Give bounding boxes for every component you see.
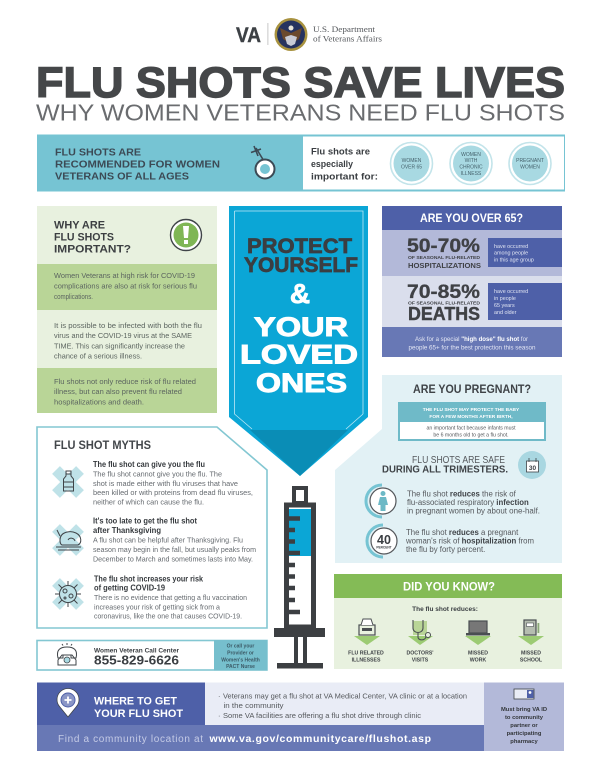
panel: are you pregnant: The flu shot reduces the risk of: [407, 490, 517, 498]
badge: women over 65: WOMEN: [402, 158, 422, 164]
icon: pregnant woman: [366, 485, 396, 517]
stat: hospitalizations: HOSPITALIZATIONS: [408, 261, 481, 270]
panel: where to get your flu shot: ·: [218, 711, 220, 720]
panel: recommended for women veterans: RECOMMENDED FOR WOMEN: [55, 160, 220, 170]
panel: are you pregnant: DURING ALL TRIMESTERS.: [382, 464, 508, 476]
stat: hospitalizations: in this age group: [494, 258, 534, 264]
icon: telephone: [57, 643, 77, 665]
banner: protect yourself: YOURSELF: [244, 254, 358, 277]
panel: where to get your flu shot: [37, 682, 564, 751]
badge: women with chronic illness: [450, 142, 492, 184]
myth 3: There is no evidence that getting a flu vaccination: [94, 593, 247, 602]
panel: why are flu shots important: It is possible to be infected with both the flu: [54, 321, 202, 330]
panel: where to get your flu shot: to community: [505, 715, 544, 721]
myth 3: [55, 574, 247, 620]
myth 2: A flu shot can be helpful after Thanksgiving. Flu: [93, 536, 243, 544]
panel: call center: PACT Nurse: [226, 664, 255, 670]
badge: women over 65: OVER 65: [401, 164, 422, 170]
stat: deaths: have occurred: [494, 289, 528, 295]
stat: deaths: OF SEASONAL FLU-RELATED: [408, 300, 481, 306]
stat: deaths: 65 years: [494, 303, 515, 309]
panel: are you over 65: ARE YOU OVER 65?: [420, 211, 523, 225]
banner: protect yourself: ONES: [256, 368, 347, 398]
panel: are you pregnant: woman's risk of hospitalization from: [405, 536, 534, 546]
myth 2: [56, 516, 256, 564]
stat: deaths: 70-85%: [407, 281, 480, 303]
VA logo header: VA: [236, 24, 261, 47]
panel: recommended for women veterans: important for:: [311, 172, 378, 182]
panel: are you over 65: [382, 206, 562, 357]
myth 3: increases your risk of getting sick from a: [94, 602, 221, 612]
icon: calendar 30: [518, 451, 546, 479]
panel: where to get your flu shot: WHERE TO GET: [94, 696, 177, 708]
panel: are you over 65: people 65+ for the best protection this season: [408, 344, 536, 352]
banner: protect yourself: &: [290, 278, 310, 309]
panel: where to get your flu shot: pharmacy: [510, 739, 538, 745]
badge: pregnant women: [509, 142, 551, 184]
icon: exclamation: [170, 220, 202, 250]
item: missed school: [518, 620, 544, 664]
panel: recommended for women veterans: Flu shots are: [311, 146, 370, 156]
panel: flu shot myths: [37, 427, 267, 628]
item: flu related illnesses: FLU RELATED: [348, 650, 384, 656]
panel: where to get your flu shot: www.va.gov/communitycare/flushot.asp: [208, 733, 431, 745]
panel: why are flu shots important: TIME. This can significantly increase the: [54, 342, 185, 350]
callout: protect the baby: THE FLU SHOT MAY PROTECT THE BABY: [423, 407, 520, 413]
icon: 40 percent: 40: [377, 533, 391, 547]
panel: are you pregnant: ARE YOU PREGNANT?: [413, 382, 531, 396]
VA logo header: [236, 18, 382, 51]
panel: why are flu shots important: hospitalizations and death.: [54, 398, 144, 406]
panel: did you know: [334, 574, 562, 669]
myth 2: season may begin in the fall, but usually peaks from: [93, 545, 256, 554]
panel: flu shot myths: FLU SHOT MYTHS: [54, 440, 151, 452]
banner: protect yourself: PROTECT: [247, 235, 352, 258]
myth 1: The flu shot can give you the flu: [93, 460, 205, 469]
item: missed work: WORK: [470, 658, 486, 664]
panel: why are flu shots important: Flu shots not only reduce risk of flu related: [54, 377, 196, 386]
panel: did you know: DID YOU KNOW?: [403, 580, 495, 594]
item: doctors' visits: [406, 620, 434, 664]
panel: why are flu shots important: FLU SHOTS: [54, 232, 114, 244]
icon: syringe: [274, 488, 325, 668]
stat: deaths: DEATHS: [408, 304, 480, 324]
stat: deaths: in people: [494, 296, 516, 302]
item: doctors' visits: VISITS: [412, 658, 429, 664]
panel: where to get your flu shot: participating: [507, 731, 542, 737]
icon: female symbol: [251, 146, 274, 178]
item: flu related illnesses: ILLNESSES: [352, 658, 381, 664]
badge: women with chronic illness: ILLNESS: [461, 171, 482, 177]
badge: pregnant women: WOMEN: [520, 164, 540, 170]
icon: VA seal: [274, 18, 308, 51]
panel: are you pregnant: [335, 375, 562, 563]
banner: protect yourself: YOUR: [254, 312, 348, 342]
panel: recommended for women veterans: FLU SHOTS ARE: [55, 148, 141, 158]
panel: call center: Women's Health: [221, 658, 260, 664]
VA logo header: U.S. Department: [313, 25, 376, 34]
myth 2: after Thanksgiving: [93, 526, 161, 535]
myth 2: It's too late to get the flu shot: [93, 516, 197, 526]
panel: call center: Women Veteran Call Center: [94, 648, 180, 654]
panel: are you pregnant: the flu by forty percent.: [406, 545, 485, 554]
icon: VA ID card: [514, 689, 534, 699]
panel: where to get your flu shot: partner or: [510, 723, 538, 729]
banner: protect yourself: [229, 206, 368, 476]
banner: protect yourself: LOVED: [240, 340, 358, 370]
panel: did you know: The flu shot reduces:: [412, 606, 478, 613]
panel: why are flu shots important: illness, but can also prevent flu related: [54, 387, 182, 396]
myth 1: shot is made either with flu viruses that have: [93, 479, 238, 488]
panel: why are flu shots important: complications.: [54, 292, 93, 301]
panel: where to get your flu shot: Find a community location at: [58, 734, 203, 745]
icon: coronavirus: [55, 581, 81, 607]
myth 2: December to March and sometimes lasts into May.: [93, 554, 253, 564]
stat: hospitalizations: among people: [494, 250, 528, 256]
badge: women with chronic illness: WOMEN: [461, 152, 481, 158]
icon: location pin: [57, 689, 79, 717]
stat: deaths: [407, 281, 562, 324]
panel: why are flu shots important: virus and the COVID-19 virus at the SAME: [54, 331, 192, 340]
panel: call center: [37, 640, 267, 670]
myth 3: coronavirus, like the one that causes COVID-19.: [94, 612, 242, 620]
item: doctors' visits: DOCTORS': [406, 650, 434, 656]
badge: women with chronic illness: CHRONIC: [459, 164, 483, 170]
stat: hospitalizations: 50-70%: [407, 235, 480, 257]
callout: protect the baby: [398, 402, 546, 441]
panel: are you pregnant: The flu shot reduces a pregnant: [406, 528, 519, 537]
myth 1: been killed or with proteins from dead flu viruses,: [93, 488, 253, 497]
stat: deaths: and older: [494, 310, 517, 316]
panel: where to get your flu shot: Veterans may get a flu shot at VA Medical Center, VA clinic or at a location: [223, 692, 467, 700]
panel: recommended for women veterans: especially: [311, 159, 354, 169]
panel: why are flu shots important: [37, 206, 217, 413]
item: missed school: SCHOOL: [520, 658, 543, 664]
panel: are you pregnant: flu-associated respiratory infection: [407, 498, 529, 507]
icon: 40 percent: PERCENT: [376, 546, 392, 550]
stat: hospitalizations: OF SEASONAL FLU-RELATED: [408, 255, 481, 261]
panel: where to get your flu shot: ·: [218, 692, 220, 700]
item: missed work: MISSED: [468, 650, 488, 656]
badge: pregnant women: PREGNANT: [516, 158, 544, 164]
icon: 40 percent: [367, 525, 397, 557]
panel: where to get your flu shot: Must bring VA ID: [501, 707, 547, 713]
callout: protect the baby: be 6 months old to get a flu shot.: [433, 432, 509, 438]
panel: recommended for women veterans: [37, 134, 565, 192]
panel: where to get your flu shot: in the community: [224, 701, 284, 710]
panel: call center: Provider or: [227, 650, 254, 656]
panel: why are flu shots important: WHY ARE: [54, 220, 105, 232]
myth 1: The flu shot cannot give you the flu. The: [93, 470, 222, 478]
panel: why are flu shots important: complications are also at risk for serious flu: [54, 282, 197, 290]
item: missed work: [465, 621, 491, 664]
panel: call center: 855-829-6626: [94, 654, 179, 668]
myth 1: neither of which can cause the flu.: [93, 498, 204, 506]
VA logo header: of Veterans Affairs: [313, 34, 382, 44]
panel: call center: Or call your: [227, 644, 254, 650]
icon: turkey: [56, 528, 81, 552]
panel: are you pregnant: in pregnant women by about one-half.: [407, 506, 540, 516]
stat: hospitalizations: have occurred: [494, 244, 528, 250]
icon: vaccine vial: [56, 470, 80, 494]
myth 1: [56, 460, 253, 506]
icon: calendar 30: 30: [529, 465, 536, 472]
item: flu related illnesses: [348, 619, 384, 664]
panel: why are flu shots important: Women Veterans at high risk for COVID-19: [54, 271, 195, 280]
myth 3: of getting COVID-19: [94, 584, 166, 592]
panel: why are flu shots important: IMPORTANT?: [54, 244, 131, 256]
stat: hospitalizations: [407, 235, 562, 270]
badge: women with chronic illness: WITH: [465, 158, 478, 164]
myth 3: The flu shot increases your risk: [94, 574, 204, 584]
panel: where to get your flu shot: Some VA facilities are offering a flu shot drive through clinic: [223, 711, 421, 720]
panel: why are flu shots important: chance of a serious illness.: [54, 352, 142, 360]
callout: protect the baby: FOR A FEW MONTHS AFTER BIRTH,: [429, 414, 513, 420]
panel: where to get your flu shot: YOUR FLU SHOT: [94, 708, 183, 720]
panel: are you pregnant: FLU SHOTS ARE SAFE: [412, 455, 505, 466]
panel: are you over 65: Ask for a special "high dose" flu shot for: [415, 336, 528, 343]
badge: women over 65: [390, 142, 432, 184]
title: FLU SHOTS SAVE LIVES: [36, 59, 565, 107]
subtitle: WHY WOMEN VETERANS NEED FLU SHOTS: [36, 100, 565, 126]
panel: recommended for women veterans: VETERANS OF ALL AGES: [55, 172, 189, 182]
callout: protect the baby: an important fact because infants must: [426, 426, 516, 432]
item: missed school: MISSED: [521, 650, 541, 656]
